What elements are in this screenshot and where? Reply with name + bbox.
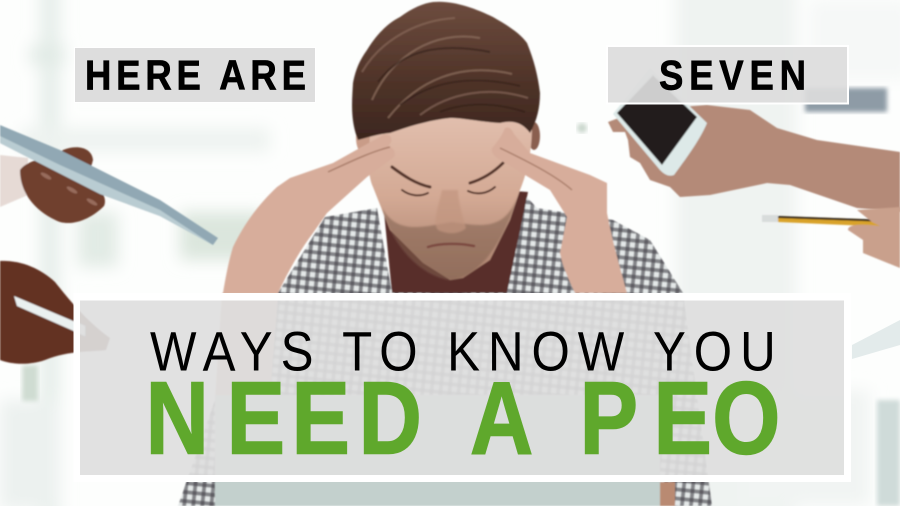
hand [848,207,900,268]
hand [20,147,105,223]
right hand holding phone [608,68,900,212]
panel: main title [74,293,851,482]
heading: ways to know you: WAYS TO KNOW YOU [150,321,776,383]
right sleeve cuff [660,482,675,506]
hair [352,2,540,140]
man with head in hands [178,2,712,506]
panel: here are [74,48,316,102]
pencil [778,216,890,227]
right hand finger line [500,148,572,190]
shirt and torso [178,193,712,506]
lower left hand holding device [0,261,110,364]
right lower device [852,320,900,359]
panel: seven [607,46,848,104]
heading: here are: HERE ARE [85,52,306,99]
heading: seven: SEVEN [659,52,806,99]
left hand holding tablet [0,125,218,245]
pale sleeves behind panel [215,293,278,400]
face [369,114,532,280]
neck shadow [384,190,528,293]
laptop [215,395,660,506]
finger highlights [40,171,98,207]
right ear [528,122,540,150]
hair strands [362,18,528,118]
brows and closed eyes [392,163,503,247]
wrist [0,155,28,207]
arm [608,105,900,212]
left hand finger line [328,147,390,172]
right arm and hand [492,127,627,293]
pencil and hand [762,207,900,268]
tablet [0,125,218,245]
left ear [356,122,372,154]
phone screen [617,75,697,165]
phone [613,68,707,176]
stubble [382,195,518,280]
left arm and hand [223,134,395,293]
heading: need a peo: NEED A PEO [146,361,780,476]
nose shade [435,190,466,233]
